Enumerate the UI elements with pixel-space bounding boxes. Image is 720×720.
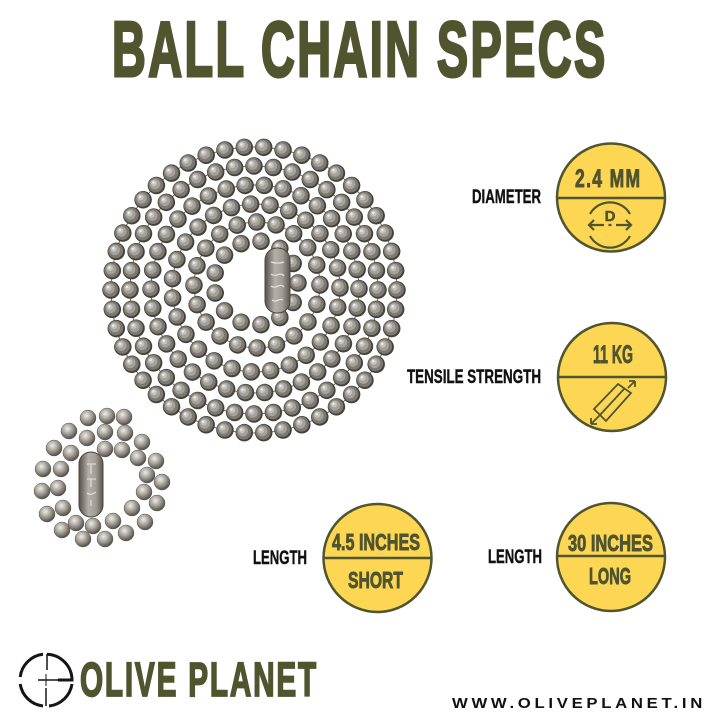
image: long ball chain coil <box>108 144 397 433</box>
label: length short: LENGTH <box>253 547 307 569</box>
badge: tensile strength 11 kg <box>558 323 666 431</box>
badge: diameter 2.4 mm: 2.4 MM <box>575 164 640 193</box>
badge: 30 inches long: LONG <box>589 563 631 589</box>
title: BALL CHAIN SPECS <box>112 6 605 93</box>
logo: wordmark: OLIVE PLANET <box>80 654 316 707</box>
badge: 4.5 inches short: 4.5 INCHES <box>332 529 420 555</box>
badge: 4.5 inches short <box>324 504 432 612</box>
label: length long: LENGTH <box>488 546 542 568</box>
badge: tensile strength 11 kg: 11 KG <box>593 341 633 369</box>
logo: crosshair mark <box>20 654 72 706</box>
badge: diameter 2.4 mm <box>557 144 665 252</box>
label: diameter: DIAMETER <box>472 186 541 208</box>
clasp on long chain <box>265 248 290 313</box>
badge: 30 inches long: 30 INCHES <box>568 530 653 556</box>
badge: 30 inches long <box>557 503 665 611</box>
label: tensile strength: TENSILE STRENGTH <box>407 366 541 388</box>
icon: diameter circle with arrows: D <box>605 208 616 225</box>
website url: WWW.OLIVEPLANET.IN <box>452 696 706 712</box>
clasp on short chain <box>79 452 103 517</box>
badge: 4.5 inches short: SHORT <box>348 567 403 593</box>
image: short ball chain loop <box>34 408 170 547</box>
icon: tension specimen with arrows <box>591 381 635 424</box>
